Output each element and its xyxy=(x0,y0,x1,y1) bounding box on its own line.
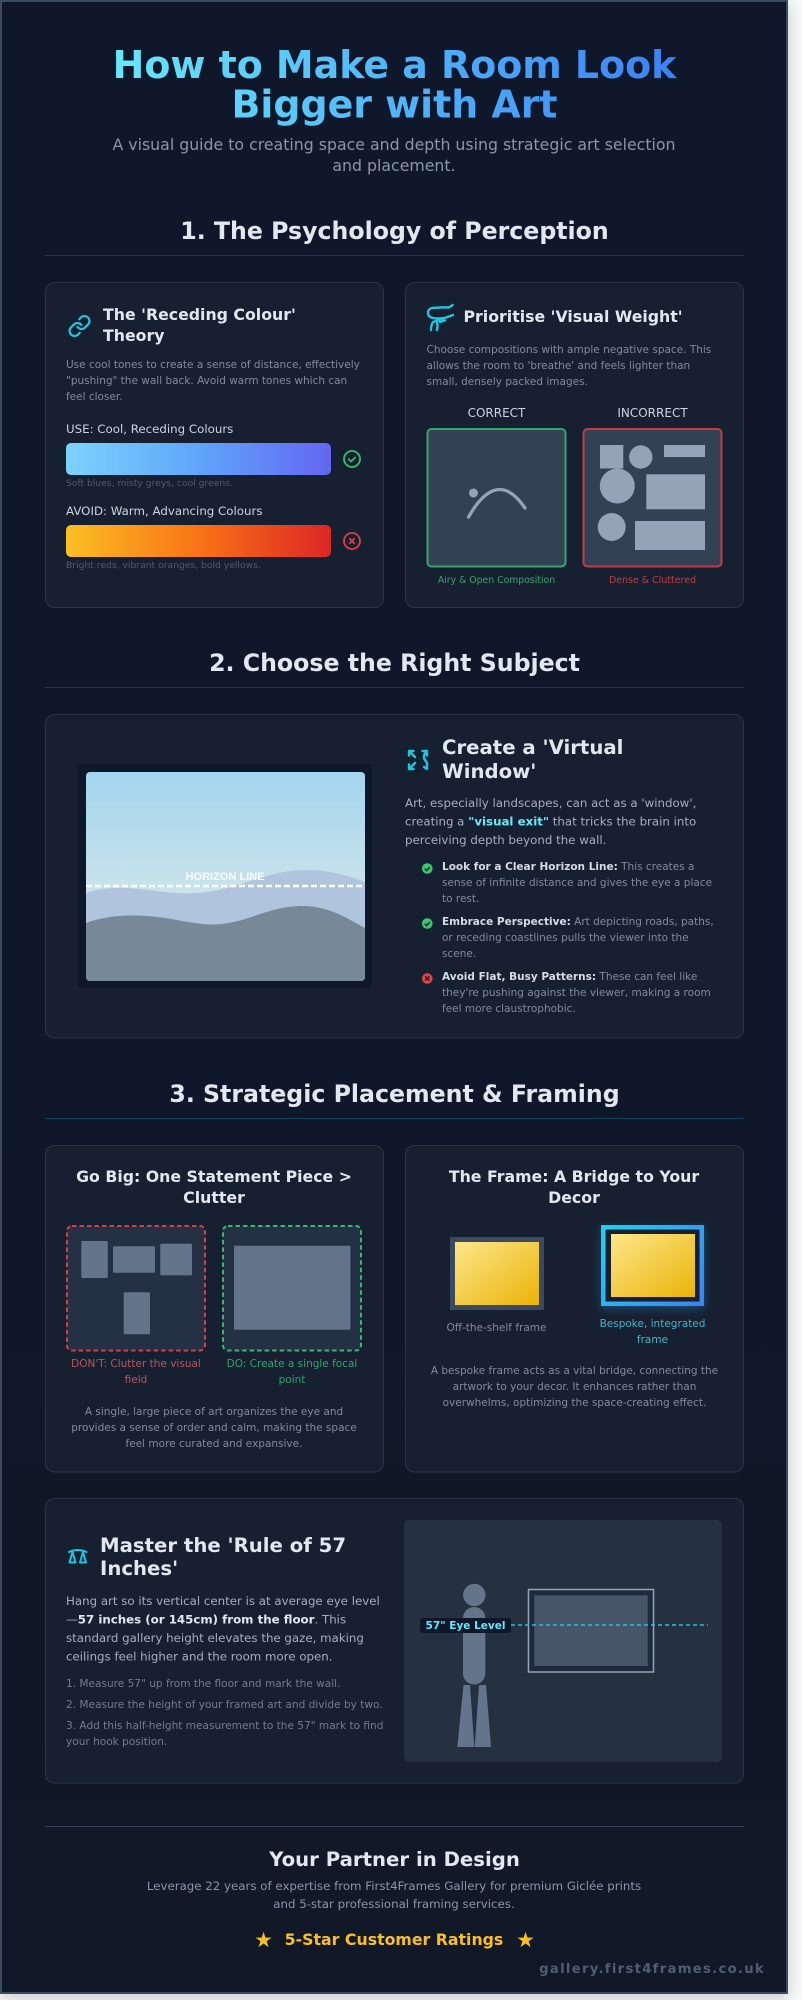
list item: avoid patterns xyxy=(422,971,711,1015)
caption: bespoke: frame xyxy=(637,1334,668,1346)
list item: avoid patterns: they're pushing against the viewer, making a room xyxy=(442,987,711,999)
text: go big description: feel more curated and expansive. xyxy=(126,1438,302,1450)
text: receding colour intro: Use cool tones to create a sense of distance, effectively xyxy=(66,359,360,371)
icon: brush xyxy=(428,305,453,330)
caption: airy: Airy & Open Composition xyxy=(438,575,555,586)
text: rule explanation: —57 inches (or 145cm) from the floor. This xyxy=(66,1612,346,1626)
text: go big description: A single, large piece of art organizes the eye and xyxy=(85,1406,343,1418)
text: visual weight intro: Choose compositions with ample negative space. This xyxy=(426,344,711,356)
list item: perspective: or receding coastlines pulls the viewer into the xyxy=(442,932,689,944)
panel: visual weight xyxy=(406,282,744,608)
heading: receding colour: Theory xyxy=(103,326,164,345)
text: virtual window intro: creating a "visual exit" that tricks the brain into xyxy=(405,814,696,828)
heading: section 1: 1. The Psychology of Perception xyxy=(180,217,609,245)
list item: perspective: scene. xyxy=(442,948,476,960)
text: frame description: overwhelms, optimizing the space-creating effect. xyxy=(443,1397,706,1409)
bar: cool gradient xyxy=(66,443,331,475)
rating: ★ xyxy=(254,1928,273,1952)
caption: warm colours: Bright reds, vibrant oranges, bold yellows. xyxy=(66,560,261,571)
panel: rule of 57 inches xyxy=(46,1498,744,1783)
text: rule explanation: Hang art so its vertical center is at average eye level xyxy=(66,1594,380,1608)
subtitle: A visual guide to creating space and depth using strategic art selection xyxy=(112,135,676,154)
diagram: statement piece xyxy=(223,1226,361,1350)
text: receding colour intro: "pushing" the wall back. Avoid warm tones which can xyxy=(66,375,347,387)
heading: rule of 57: Master the 'Rule of 57 xyxy=(100,1534,346,1557)
heading: visual weight: Prioritise 'Visual Weight' xyxy=(464,307,683,326)
text: partner description: Leverage 22 years of expertise from First4Frames Gallery for premium Giclée prints xyxy=(147,1879,641,1893)
illustration: landscape with horizon line xyxy=(78,764,372,988)
list item: perspective xyxy=(422,916,714,960)
illustration: bespoke frame xyxy=(601,1227,704,1309)
caption: dense: Dense & Cluttered xyxy=(609,575,696,586)
bar: warm gradient xyxy=(66,525,331,557)
list item: horizon line: Look for a Clear Horizon Line: This creates a xyxy=(442,861,694,873)
label: eye level: 57" Eye Level xyxy=(426,1620,505,1632)
heading: go big: Clutter xyxy=(183,1188,245,1207)
heading: go big: Go Big: One Statement Piece > xyxy=(76,1167,352,1186)
panel: receding colour theory xyxy=(46,282,384,608)
text: rule explanation: ceilings feel higher and the room more open. xyxy=(66,1650,333,1664)
list: steps: 3. Add this half-height measurement to the 57" mark to find xyxy=(66,1720,383,1732)
figure: framed art xyxy=(528,1590,654,1672)
list: steps: 1. Measure 57" up from the floor and mark the wall. xyxy=(66,1678,340,1690)
heading: section 3: 3. Strategic Placement & Framing xyxy=(169,1080,620,1108)
illustration: landscape with horizon line: HORIZON LINE xyxy=(186,871,264,883)
caption: bespoke: Bespoke, integrated xyxy=(600,1318,705,1330)
footer xyxy=(45,1826,765,1977)
header xyxy=(112,43,677,175)
caption: do: point xyxy=(279,1374,305,1386)
list item: avoid patterns: feel more claustrophobic. xyxy=(442,1003,576,1015)
diagram: airy composition xyxy=(428,429,566,566)
heading: section 2: 2. Choose the Right Subject xyxy=(209,649,580,677)
list item: horizon line: sense of infinite distance and gives the eye a place xyxy=(442,877,712,889)
list item: horizon line xyxy=(422,861,712,905)
label: avoid warm colours: AVOID: Warm, Advancing Colours xyxy=(66,504,262,518)
illustration: off-the-shelf frame xyxy=(450,1237,544,1310)
heading: virtual window: Create a 'Virtual xyxy=(442,736,623,759)
heading: the frame: The Frame: A Bridge to Your xyxy=(449,1167,699,1186)
list item: perspective: Embrace Perspective: Art depicting roads, paths, xyxy=(442,916,714,928)
rating: 5-Star Customer Ratings xyxy=(285,1930,503,1949)
list: steps: your hook position. xyxy=(66,1736,167,1748)
label: use cool colours: USE: Cool, Receding Colours xyxy=(66,422,233,436)
text: virtual window intro: perceiving depth beyond the wall. xyxy=(405,833,606,847)
diagram: cluttered wall xyxy=(67,1226,205,1350)
icon: cross circle xyxy=(344,533,360,549)
text: frame description: artwork to your decor. It enhances rather than xyxy=(453,1381,696,1393)
heading: the frame: Decor xyxy=(548,1188,600,1207)
caption: off-the-shelf: Off-the-shelf frame xyxy=(447,1322,546,1334)
icon: check circle xyxy=(344,451,360,467)
label: correct: CORRECT xyxy=(468,406,526,420)
list item: avoid patterns: Avoid Flat, Busy Patterns: These can feel like xyxy=(442,971,697,983)
panel: go big xyxy=(46,1146,384,1472)
text: partner description: and 5-star professional framing services. xyxy=(273,1897,515,1911)
diagram: dense composition xyxy=(584,429,722,566)
panel: the frame xyxy=(406,1146,744,1472)
label: incorrect: INCORRECT xyxy=(617,406,688,420)
text: virtual window intro: Art, especially landscapes, can act as a 'window', xyxy=(405,796,696,810)
text: frame description: A bespoke frame acts as a vital bridge, connecting the xyxy=(431,1365,718,1377)
heading: partner: Your Partner in Design xyxy=(268,1848,520,1871)
text: go big description: provides a sense of order and calm, making the space xyxy=(71,1422,357,1434)
text: rule explanation: standard gallery height elevates the gaze, making xyxy=(66,1631,364,1645)
text: visual weight intro: allows the room to 'breathe' and feels lighter than xyxy=(426,360,690,372)
icon: expand arrows xyxy=(409,751,427,769)
text: receding colour intro: feel closer. xyxy=(66,391,123,403)
caption: don't: field xyxy=(125,1374,147,1386)
rating: ★ xyxy=(516,1928,535,1952)
list: steps: 2. Measure the height of your framed art and divide by two. xyxy=(66,1699,383,1711)
heading: virtual window: Window' xyxy=(442,760,536,783)
icon: scales xyxy=(69,1550,86,1562)
icon: link xyxy=(70,316,89,336)
text: visual weight intro: small, densely packed images. xyxy=(426,376,588,388)
panel: virtual window xyxy=(46,714,744,1038)
heading: rule of 57: Inches' xyxy=(100,1557,178,1580)
figure: person xyxy=(457,1584,491,1747)
caption: do: DO: Create a single focal xyxy=(227,1358,357,1370)
caption: cool colours: Soft blues, misty greys, cool greens. xyxy=(66,478,233,489)
rating xyxy=(254,1928,535,1952)
subtitle: and placement. xyxy=(332,156,456,175)
title: How to Make a Room Look xyxy=(113,43,677,87)
diagram: eye level xyxy=(404,1520,722,1762)
title: Bigger with Art xyxy=(231,82,558,126)
url: gallery.first4frames.co.uk xyxy=(539,1962,765,1977)
list item: horizon line: to rest. xyxy=(442,893,479,905)
heading: receding colour: The 'Receding Colour' xyxy=(103,305,296,324)
caption: don't: DON'T: Clutter the visual xyxy=(71,1358,201,1370)
